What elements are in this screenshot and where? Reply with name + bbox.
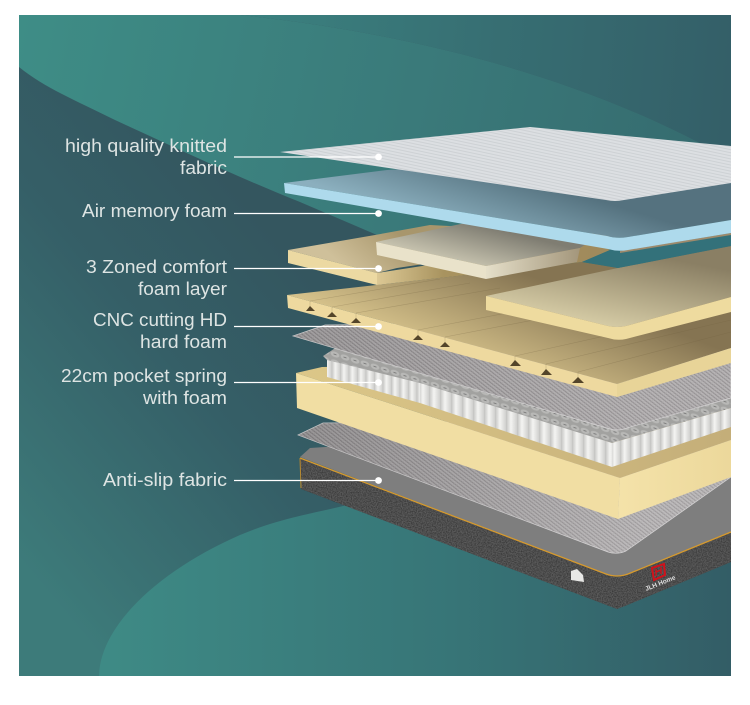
label: CNC hard foam: hard foam	[140, 332, 227, 352]
layer: base with anti-slip fabric	[300, 446, 731, 609]
layer: lower mesh fabric	[298, 420, 731, 553]
label: pocket spring: 22cm pocket spring	[61, 366, 227, 386]
layer: zoned foam middle block	[376, 222, 600, 279]
label: pocket spring: with foam	[142, 388, 227, 408]
label: CNC hard foam	[93, 310, 382, 352]
icon: brand logo	[644, 564, 677, 593]
layer: CNC cutting foam	[287, 246, 731, 397]
layer: air memory foam	[284, 170, 731, 253]
label: anti-slip fabric: Anti-slip fabric	[103, 470, 227, 490]
layer: zoned foam right block	[486, 246, 731, 340]
icon: mattress label tag	[571, 569, 584, 582]
label: anti-slip fabric	[103, 470, 382, 490]
icon: brand logo: JLH Home	[644, 574, 677, 593]
label: knitted fabric	[65, 136, 382, 178]
label: air memory foam	[82, 201, 382, 221]
layer: upper mesh fabric	[293, 320, 731, 430]
layer: yellow foam encasement	[296, 360, 731, 519]
label: knitted fabric: high quality knitted	[65, 136, 227, 156]
teal gap between foam layers	[582, 232, 731, 268]
layer: zoned foam left block	[288, 225, 620, 285]
mattress exploded layers	[280, 127, 731, 609]
label: zoned comfort foam: 3 Zoned comfort	[86, 257, 227, 277]
label: knitted fabric: fabric	[180, 158, 227, 178]
label: CNC hard foam: CNC cutting HD	[93, 310, 227, 330]
layer: pocket springs	[323, 340, 731, 467]
label: zoned comfort foam	[86, 257, 382, 299]
label: air memory foam: Air memory foam	[82, 201, 227, 221]
layer: knitted fabric	[280, 127, 731, 201]
label: zoned comfort foam: foam layer	[138, 279, 227, 299]
label: pocket spring	[61, 366, 382, 408]
